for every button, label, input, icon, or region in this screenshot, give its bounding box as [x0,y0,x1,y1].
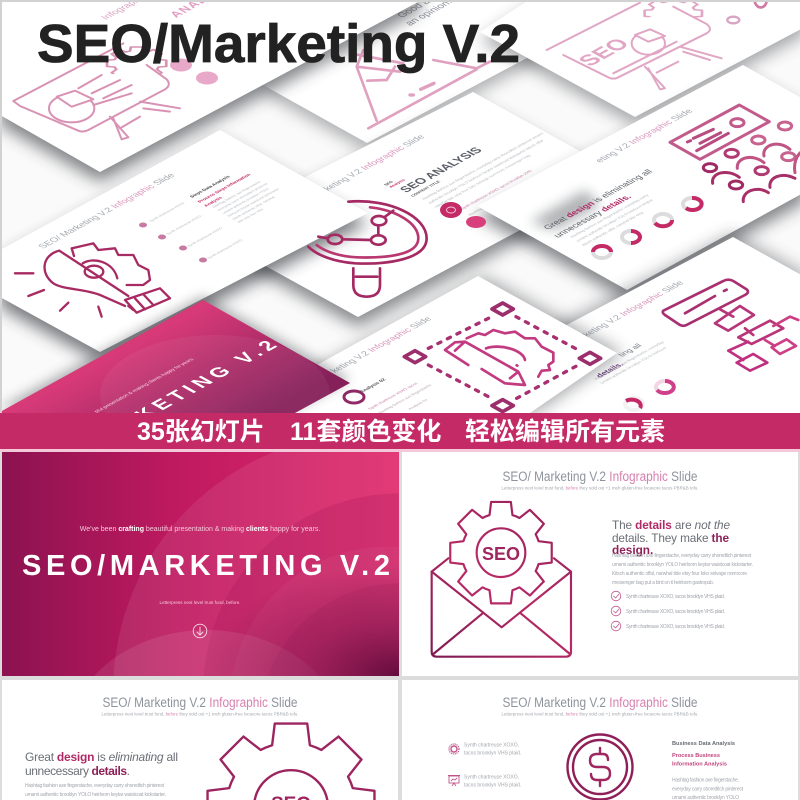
paragraph lines: kitsch authentic offal, narwhal tide etsy [581,211,645,246]
content title: CONTENT TITLE [410,180,442,197]
feature list: Synth chartreuse XOXO, [206,238,244,259]
slide: cover tilted [0,296,350,455]
border: top and left edge [0,0,800,413]
checklist: Synth chartreuse XOXO, tacos brooklyn VHS plaid. [626,594,725,600]
band text: slides: 35张幻灯片 [137,418,265,446]
process heading second line: Information Analysis [672,762,727,768]
paragraph: Hashtag fashion axe fingerstache, everyday carry shoreditch pinterest [25,783,165,789]
analysis badge [344,391,364,403]
slide: SEO easel [480,0,800,125]
details fragment: details. [594,361,626,379]
paragraph lines: umami authentic brooklyn YOLO heirloom [599,346,668,384]
icon: dollar coin [568,734,632,800]
feature one text: Synth chartreuse XOXO, [464,742,519,748]
paragraph lines: Hashtag fashion axe fingerstache, [211,180,262,208]
checklist: Synth chartreuse XOXO, tacos brooklyn VHS plaid. [626,624,725,630]
icon: flowchart [663,280,798,371]
slide title: keting V.2 Infographic Slide [580,279,686,338]
heading line one: The details are not the [612,518,730,532]
paragraph: umami authentic brooklyn YOLO heirloom keytar waistcoat kickstarter. [25,792,166,798]
paragraph lines: heirloom keytar waistcoat kickstarter [226,187,281,217]
heading: great design: Great design is eliminating all [541,168,655,231]
round button one [440,202,462,218]
right paragraph: everyday carry shoreditch pinterest [672,786,744,792]
feature two text: Synth chartreuse XOXO, [464,774,519,780]
feature one text [464,742,521,756]
slide title: eting V.2 Infographic Slide [593,108,695,164]
slide: triangle icon [261,2,542,153]
heading fragment: ting all [616,342,644,358]
band text: editing: 轻松编辑所有元素 [465,418,665,446]
checklist: Synth chartreuse XOXO, tacos brooklyn VHS plaid. [626,609,725,615]
panel: great design slide [2,680,398,800]
cover subtitle: Letterpress next level trust fund, before. [160,600,240,605]
slide header: SEO/ Marketing V.2 Infographic Slide [102,695,297,710]
divider under band [0,449,800,452]
heading line two: unnecessary details. [25,764,130,778]
slide: lightbulb [0,130,368,362]
icon label SEO: SEO [482,544,520,564]
paragraph lines: Hashtag fashion axe fingerstache [377,383,433,414]
paragraph: Kitsch authentic offal, narwhal tide etsy four loko selvage normcore [612,571,747,577]
cover strapline: tiful presentation & making clients happy for years. [94,357,196,414]
round button two [466,216,486,228]
cover strapline: We've been crafting beautiful presentation & making clients happy for years. [80,526,320,533]
icon dot two [196,72,218,84]
right paragraph: Hashtag fashion axe fingerstache, [672,778,739,784]
feature two text [464,774,521,788]
icon: lightbulb and gear [15,243,170,317]
paragraph lines: tide etsy four loko [236,208,265,223]
heading: SEO analysis: SEO ANALYSIS [396,145,485,194]
icon: easel with gear and SEO [547,0,767,89]
heading line one: Great design is eliminating all [25,750,178,764]
panel: cover slide [2,433,627,800]
paragraph lines: Hashtag fashion axe fingerstache, everyday carry [569,193,650,238]
donut charts [593,198,702,258]
right heading: Business Data Analysis [672,741,735,747]
slide: flowchart [555,226,800,410]
feature list [139,201,244,262]
analysis label fragment: Analysis [388,178,407,188]
slide: pencil and gear [312,269,626,413]
slide title: keting V.2 Infographic Slide [328,315,434,374]
corner shadow on slide [530,190,600,230]
magnifier slide title: keting V.2 Infographic Slide [321,133,427,192]
process heading: Process Business [672,753,720,759]
cover title: KETING V.2 [130,338,282,422]
SEO label fragment: SEO [383,180,394,186]
icon: flower badge [449,744,459,754]
main title: SEO/Marketing V.2 [37,14,520,74]
isometric slide collage [0,0,800,455]
icon: presentation board [448,776,460,786]
top collage background [0,0,800,413]
analysis paragraph lines: narwhal tide etsy four loko selvage normcore messenger bag [433,154,531,208]
right paragraph [672,778,744,800]
icon: card with ring rows [670,105,800,202]
feature band [0,413,800,449]
feature two text: tacos brooklyn VHS plaid. [464,782,521,788]
paragraph lines: umami authentic brooklyn YOLO heirloom keytar [575,198,655,242]
slide title: SEO/ Marketing V.2 Infographic Slide [36,172,177,250]
paragraph lines: everyday carry shoreditch pinterest [216,182,269,211]
slide: top-left easel [0,0,420,182]
paragraph: umami authentic brooklyn YOLO heirloom keytar waistcoat kickstarter. [612,562,753,568]
slide subheader: Letterpress next level trust fund, before they sold out +1 meh gluten-free locavore tacos PBR&B tofu. [502,712,698,716]
slide header: SEO/ Marketing V.2 Infographic Slide [502,695,698,710]
paragraph [612,553,753,586]
heading second line: unnecessary details. [551,193,634,239]
heading line two: details. They make the [612,531,729,545]
process heading second line: Analysis [203,196,224,207]
feature list: Synth chartreuse XOXO, [148,201,186,222]
heading line three: design. [612,543,653,557]
icon: dotted frame with pencil and gear [404,303,601,412]
data analysis heading: Steps Data Analysis [189,175,232,198]
icon: easel with pie chart [13,40,180,139]
paragraph: Hashtag fashion axe fingerstache, everyday carry shoreditch pinterest [612,553,752,559]
panel: SEO envelope slide [402,452,798,676]
icon: envelope with SEO gear [432,502,571,657]
feature one text: tacos brooklyn VHS plaid. [464,750,521,756]
paragraph lines: Hashtag fashion axe fingerstache, everyday [593,340,665,380]
slide header: SEO/ Marketing V.2 Infographic Slide [502,469,698,484]
slide: great design with ring icons [477,65,800,300]
icon: down arrow [193,624,207,638]
analysis paragraph lines: Hashtag fashion axe fingerstache, everyday [467,176,539,216]
feature list: Synth chartreuse XOXO, [165,214,203,235]
process heading: Process Steps Information [197,173,252,203]
analysis paragraph lines: Hashtag fashion axe fingerstache, everyday carry shoreditch pinterest umami [421,132,545,200]
cover title: SEO/MARKETING V.2 [22,550,390,582]
checklist [611,591,725,631]
icon: magnifier [308,201,427,297]
analysis paragraph lines: Synth chartreuse XOXO, tacos brooklyn VHS [459,169,533,210]
icon: SEO gear [208,724,374,800]
analysis label: Analysis 02 [359,378,388,394]
icon dot one [170,58,192,72]
slide: SEO analysis [248,92,582,335]
donut charts [625,381,674,410]
SEO easel label: SEO [573,35,635,69]
panel: business data slide [402,680,798,800]
paragraph lines [211,180,281,223]
paragraph lines: umami authentic brooklyn YOLO [221,187,270,214]
paragraph [25,783,166,798]
paragraph lines: Analysis 04 [407,398,429,410]
analysis paragraph lines: authentic brooklyn YOLO heirloom keytar waistcoat kickstarter kitsch offal [427,139,545,204]
paragraph lines: kitsch authentic offal, narwhal [231,196,276,220]
feature list: Synth chartreuse XOXO, [186,226,224,247]
band text: colours: 11套颜色变化 [290,418,441,446]
slide subheader: Letterpress next level trust fund, before they sold out +1 meh gluten-free locavore tacos PBR&B tofu. [502,486,698,490]
paragraph: messenger bag put a bird on it heirloom gastropub. [612,580,714,586]
paragraph lines: Synth chartreuse XOXO, tacos [367,382,419,410]
slide subheader: Letterpress next level trust fund, before they sold out +1 meh gluten-free locavore tacos PBR&B tofu. [102,712,298,716]
